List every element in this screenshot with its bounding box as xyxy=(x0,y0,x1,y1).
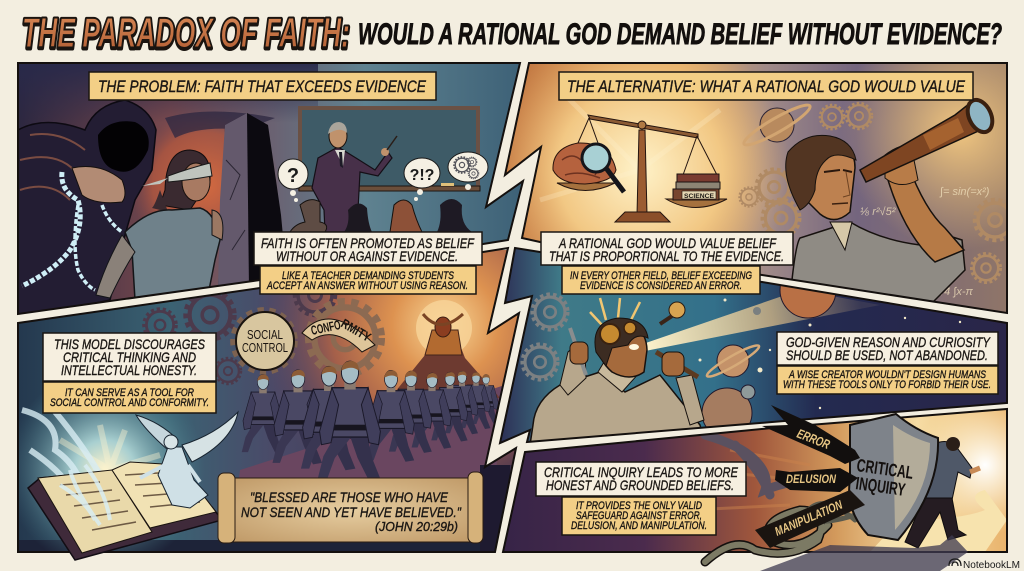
text block: reason and curiosity xyxy=(777,332,998,365)
text block: teacher analogy: ACCEPT AN ANSWER WITHOUT USING REASON. xyxy=(266,280,468,292)
sparks xyxy=(590,298,640,325)
marching soldiers xyxy=(242,361,499,481)
gear: conformity xyxy=(302,302,381,374)
text block: only valid safeguard: SAFEGUARD AGAINST ERROR, xyxy=(576,510,702,522)
text block: teacher analogy xyxy=(260,266,476,294)
text block: social control tool: SOCIAL CONTROL AND CONFORMITY. xyxy=(50,397,209,409)
equations xyxy=(860,186,990,298)
heading: the problem xyxy=(89,72,436,100)
text block: wise creator xyxy=(777,366,998,394)
glowing chains xyxy=(22,172,122,290)
gear: social control: CONTROL xyxy=(242,340,288,355)
light beam xyxy=(646,296,879,350)
gear: social control xyxy=(234,311,294,371)
arrow: error: ERROR xyxy=(795,426,832,452)
text block: every other field: IN EVERY OTHER FIELD, BELIEF EXCEEDING xyxy=(570,270,752,282)
title: THE PARADOX OF FAITH: xyxy=(22,9,350,56)
runner xyxy=(905,437,980,548)
planets xyxy=(702,286,836,426)
text block: faith is promoted: FAITH IS OFTEN PROMOTED AS BELIEF xyxy=(261,235,475,251)
panel: reason and curiosity xyxy=(500,248,1010,448)
tool gears xyxy=(522,294,568,380)
balance scale xyxy=(557,115,727,222)
title: THE PARADOX OF FAITH: xyxy=(22,10,350,57)
text block: rational god: THAT IS PROPORTIONAL TO THE EVIDENCE. xyxy=(549,248,784,264)
blackboard xyxy=(299,108,480,191)
text block: critical inquiry leads xyxy=(536,462,746,496)
text block: discourages critical thinking: INTELLECTUAL HONESTY. xyxy=(61,362,197,378)
notebooklm badge: NotebookLM xyxy=(963,560,1020,571)
science books xyxy=(673,174,720,200)
text block: only valid safeguard: DELUSION, AND MANIPULATION. xyxy=(571,520,707,532)
angel xyxy=(136,412,238,508)
gear: social control: SOCIAL xyxy=(247,327,283,342)
saturn xyxy=(742,104,812,146)
telescope xyxy=(860,96,997,182)
text block: social control tool xyxy=(43,382,216,413)
temple silhouette xyxy=(395,300,500,398)
quotation scroll: NOT SEEN AND YET HAVE BELIEVED." xyxy=(241,504,462,520)
gear: conformity: CONFO xyxy=(310,317,342,338)
text block: rational god: A RATIONAL GOD WOULD VALUE BELIEF xyxy=(558,235,777,251)
text block: faith is promoted: WITHOUT OR AGAINST EVIDENCE. xyxy=(276,248,458,264)
text block: every other field: EVIDENCE IS CONSIDERED AN ERROR. xyxy=(580,280,742,292)
arrow: manipulation xyxy=(755,490,865,548)
panel: blind obedience xyxy=(5,248,530,570)
quotation scroll: "BLESSED ARE THOSE WHO HAVE xyxy=(250,489,449,505)
heading: the problem: THE PROBLEM: FAITH THAT EXCEEDS EVIDENCE xyxy=(98,77,427,96)
open book xyxy=(28,462,222,560)
background gears xyxy=(142,294,338,386)
thought bubble: question xyxy=(278,159,308,202)
quotation scroll: (JOHN 20:29b) xyxy=(375,519,458,534)
shield: critical inquiry: CRITICAL xyxy=(855,455,915,483)
wispy light xyxy=(21,407,101,476)
text block: critical inquiry leads: HONEST AND GROUNDED BELIEFS. xyxy=(546,477,734,493)
arrow: delusion xyxy=(775,468,858,492)
smoke xyxy=(700,434,787,500)
thought bubble: question marks: ?!? xyxy=(410,167,434,184)
thought bubble: gears xyxy=(448,152,488,190)
students xyxy=(290,199,472,232)
shadow under runner xyxy=(760,535,968,571)
quotation scroll xyxy=(218,472,483,543)
man with telescope xyxy=(786,135,965,305)
text block: only valid safeguard xyxy=(562,497,716,535)
text block: discourages critical thinking: CRITICAL THINKING AND xyxy=(63,349,196,365)
text block: discourages critical thinking: THIS MODEL DISCOURAGES xyxy=(54,336,206,352)
man with wrench and flashlight xyxy=(530,318,705,445)
icon: monolith xyxy=(218,113,282,285)
equations: ⅛ r²√5² xyxy=(860,206,896,218)
arrow: delusion: DELUSION xyxy=(786,472,836,486)
science books: SCIENCE xyxy=(684,193,715,200)
stars xyxy=(698,298,961,409)
teacher xyxy=(312,122,397,232)
title xyxy=(22,9,1002,57)
gears background xyxy=(739,103,1015,282)
text block: teacher analogy: LIKE A TEACHER DEMANDING STUDENTS xyxy=(282,270,455,282)
text block: social control tool: IT CAN SERVE AS A TOOL FOR xyxy=(65,387,194,399)
text block: only valid safeguard: IT PROVIDES THE ONLY VALID xyxy=(576,500,702,512)
arrow: manipulation: MANIPULATION xyxy=(773,497,845,539)
text block: every other field xyxy=(562,266,760,294)
equations: = -√4 ∫x-π xyxy=(925,286,974,298)
equations: ∫= sin(=x²) xyxy=(939,186,990,198)
brain with magnifier xyxy=(553,143,624,192)
lightbulb xyxy=(660,302,685,324)
blindfolded woman xyxy=(96,150,223,300)
snake xyxy=(705,504,870,562)
reaper figure xyxy=(18,100,156,320)
panel: critical inquiry xyxy=(502,408,1008,553)
arrow: error xyxy=(762,405,860,464)
text block: critical inquiry leads: CRITICAL INQUIRY LEADS TO MORE xyxy=(544,464,739,480)
shield: critical inquiry xyxy=(849,414,938,540)
text block: rational god xyxy=(541,232,793,265)
heading: the alternative xyxy=(559,72,973,100)
text block: discourages critical thinking xyxy=(43,333,216,381)
thought bubble: question: ? xyxy=(287,165,299,187)
shield: critical inquiry: INQUIRY xyxy=(854,473,907,500)
gear: conformity: RMITY xyxy=(338,316,374,345)
panel: the problem xyxy=(18,63,528,320)
thought bubble: question marks xyxy=(404,158,440,201)
panel: the alternative xyxy=(505,63,1015,318)
text block: faith is promoted xyxy=(254,232,482,265)
